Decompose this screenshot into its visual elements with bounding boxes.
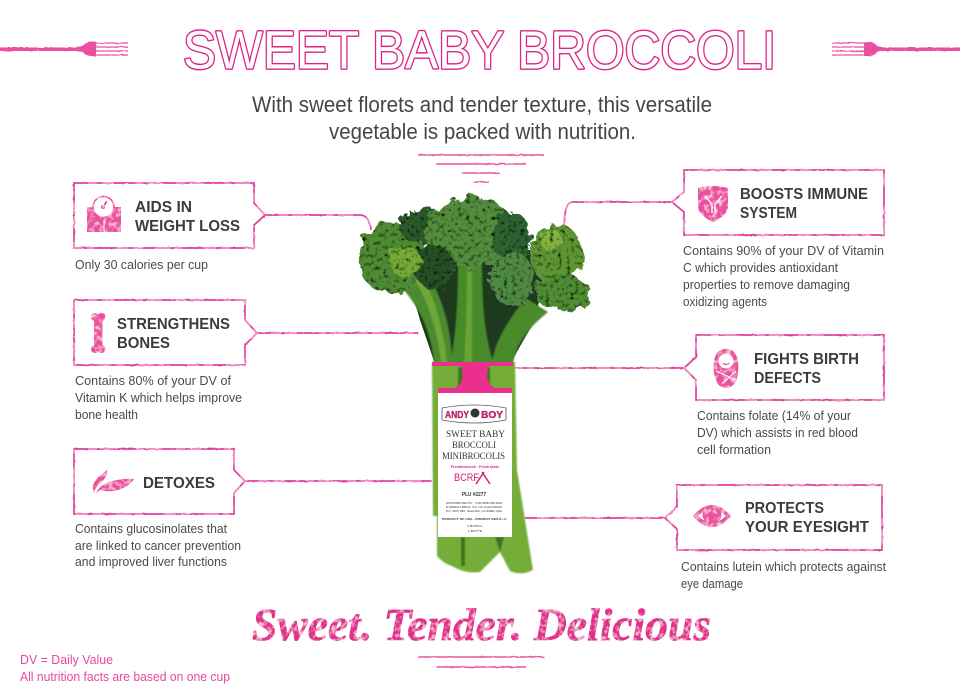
tag product name: BROCCOLI	[452, 441, 496, 451]
body text: properties to remove damaging	[683, 278, 850, 292]
brand logo: ANDY	[445, 410, 469, 421]
body text: Vitamin K which helps improve	[75, 391, 242, 405]
brand logo	[442, 405, 506, 423]
heading: AIDS IN	[135, 199, 192, 216]
panel: strengthens bones	[74, 300, 257, 422]
heading	[745, 500, 869, 536]
body text: C which provides antioxidant	[683, 261, 839, 275]
body text: Contains 80% of your DV of	[75, 374, 232, 388]
heading	[740, 186, 868, 222]
heading: STRENGTHENS	[117, 316, 230, 333]
tag fine print: P.O. BOX 850, SALINAS, CA 93902 USA	[446, 509, 502, 513]
heading: DEFECTS	[754, 370, 821, 387]
body text	[683, 244, 884, 309]
subtitle: With sweet florets and tender texture, this versatile	[252, 92, 712, 117]
BCRF logo: Freshbroccoli · Fresh taste	[451, 465, 499, 469]
title: SWEET BABY BROCCOLI	[183, 20, 776, 80]
tag fine print: DISTRIBUTED BY · DISTRIBUTÉ PAR	[446, 500, 503, 505]
heading: PROTECTS	[745, 500, 824, 517]
body text	[697, 409, 858, 457]
heading: FIGHTS BIRTH	[754, 351, 859, 368]
icon: left fork	[0, 42, 128, 56]
tag fine print: D'ARRIGO BROS. CO. OF CALIFORNIA	[446, 505, 502, 509]
body text	[75, 374, 242, 422]
BCRF logo: BCRF	[454, 472, 479, 484]
brand logo: BOY	[481, 410, 503, 421]
panel: fights birth defects	[684, 335, 884, 457]
broccoli bunch	[358, 197, 591, 573]
icon: bone	[91, 313, 106, 353]
heading	[135, 199, 240, 235]
BCRF logo	[451, 465, 499, 484]
icon: right fork	[832, 42, 960, 56]
upper stems	[394, 262, 548, 364]
body text	[75, 522, 241, 569]
heading: SYSTEM	[740, 205, 797, 222]
tag product name	[442, 430, 505, 462]
bottom ornament lines	[418, 657, 544, 667]
panel: boosts immune system	[672, 170, 884, 309]
icon: leaves	[93, 470, 134, 493]
tag fine print	[442, 492, 507, 533]
top ornament lines	[418, 155, 544, 182]
panel: detoxes	[74, 449, 245, 569]
icon: weighing scale	[87, 196, 121, 232]
footnote: All nutrition facts are based on one cup	[20, 670, 230, 684]
heading: WEIGHT LOSS	[135, 218, 240, 235]
body text: oxidizing agents	[683, 295, 767, 309]
body text	[681, 560, 887, 591]
footnote	[20, 653, 230, 684]
icon: eye	[693, 505, 731, 527]
body text: DV) which assists in red blood	[697, 426, 858, 440]
body text: are linked to cancer prevention	[75, 539, 241, 553]
heading	[117, 316, 230, 352]
tag fine print: PLU #2277	[462, 492, 486, 498]
body text: Contains folate (14% of your	[697, 409, 851, 423]
title: SWEET BABY BROCCOLI	[183, 20, 776, 80]
tag fine print: 1 BOTTE	[468, 529, 482, 533]
connector lines	[245, 202, 684, 518]
icon: swaddled baby	[714, 349, 738, 388]
tag fine print: 1 BUNCH	[467, 524, 482, 528]
product tag	[438, 393, 512, 537]
body text: Contains lutein which protects against	[681, 560, 887, 574]
panel: protects your eyesight	[665, 485, 887, 591]
tagline: Sweet. Tender. Delicious	[252, 600, 711, 650]
body text: bone health	[75, 408, 138, 422]
tag product name: SWEET BABY	[446, 430, 505, 440]
body text: cell formation	[697, 443, 771, 457]
heading: YOUR EYESIGHT	[745, 519, 869, 536]
heading: BOOSTS IMMUNE	[740, 186, 868, 203]
florets	[358, 197, 591, 311]
body text: and improved liver functions	[75, 555, 227, 569]
body text: eye damage	[681, 577, 743, 591]
lower stems	[432, 362, 533, 573]
heading: DETOXES	[143, 475, 215, 492]
body text: Contains glucosinolates that	[75, 522, 228, 536]
subtitle: vegetable is packed with nutrition.	[329, 119, 636, 144]
heading: BONES	[117, 335, 170, 352]
body text: Only 30 calories per cup	[75, 258, 208, 272]
subtitle	[252, 92, 712, 144]
footnote: DV = Daily Value	[20, 653, 113, 667]
body text: Contains 90% of your DV of Vitamin	[683, 244, 884, 258]
dark mass behind stems	[400, 250, 550, 364]
pink band and tag holder	[432, 362, 513, 394]
tag fine print: PRODUCT OF USA · PRODUIT DES É.-U.	[442, 516, 507, 521]
panel: aids in weight loss	[74, 183, 265, 272]
icon: shield	[698, 186, 728, 222]
tag product name: MINIBROCOLIS	[442, 452, 505, 462]
heading	[754, 351, 859, 387]
